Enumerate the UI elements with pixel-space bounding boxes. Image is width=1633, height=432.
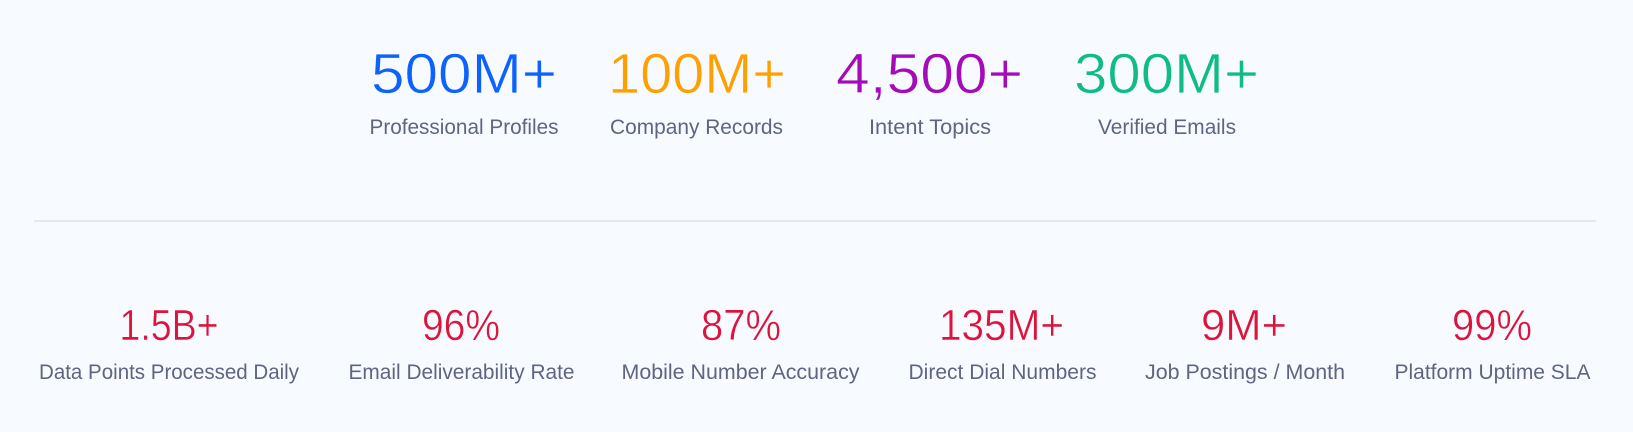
stat: company records: 100M+	[608, 42, 786, 106]
stat: verified emails: 300M+	[1074, 42, 1259, 106]
stat: professional profiles: 500M+	[371, 42, 557, 106]
stat: professional profiles	[370, 42, 558, 139]
stat: company records	[608, 42, 786, 139]
stat: professional profiles: Professional Profiles	[370, 116, 558, 139]
stat: direct dial numbers: 135M+	[939, 301, 1064, 350]
stat: intent topics: Intent Topics	[869, 116, 991, 139]
stat: mobile number accuracy	[622, 301, 860, 384]
stat: data points processed daily	[39, 301, 299, 384]
stat: verified emails	[1074, 42, 1259, 139]
stat: email deliverability rate: Email Deliverability Rate	[348, 361, 574, 384]
stat: direct dial numbers: Direct Dial Numbers	[908, 361, 1096, 384]
stat: intent topics	[836, 42, 1023, 139]
stat: email deliverability rate: 96%	[422, 301, 500, 350]
stat: job postings per month: Job Postings / Month	[1145, 361, 1345, 384]
stat: verified emails: Verified Emails	[1098, 116, 1236, 139]
stat: data points processed daily: 1.5B+	[120, 301, 218, 350]
stat: platform uptime sla: Platform Uptime SLA	[1394, 361, 1590, 384]
stat: platform uptime sla	[1394, 301, 1590, 384]
stat: job postings per month: 9M+	[1201, 301, 1287, 350]
stat: intent topics: 4,500+	[836, 42, 1023, 106]
stat: mobile number accuracy: 87%	[701, 301, 781, 350]
stat: direct dial numbers	[908, 301, 1096, 384]
stat: job postings per month	[1145, 301, 1345, 384]
stat: email deliverability rate	[348, 301, 574, 384]
stat: platform uptime sla: 99%	[1452, 301, 1532, 350]
stat: data points processed daily: Data Points Processed Daily	[39, 361, 299, 384]
stat: company records: Company Records	[610, 116, 783, 139]
stat: mobile number accuracy: Mobile Number Accuracy	[622, 361, 860, 384]
